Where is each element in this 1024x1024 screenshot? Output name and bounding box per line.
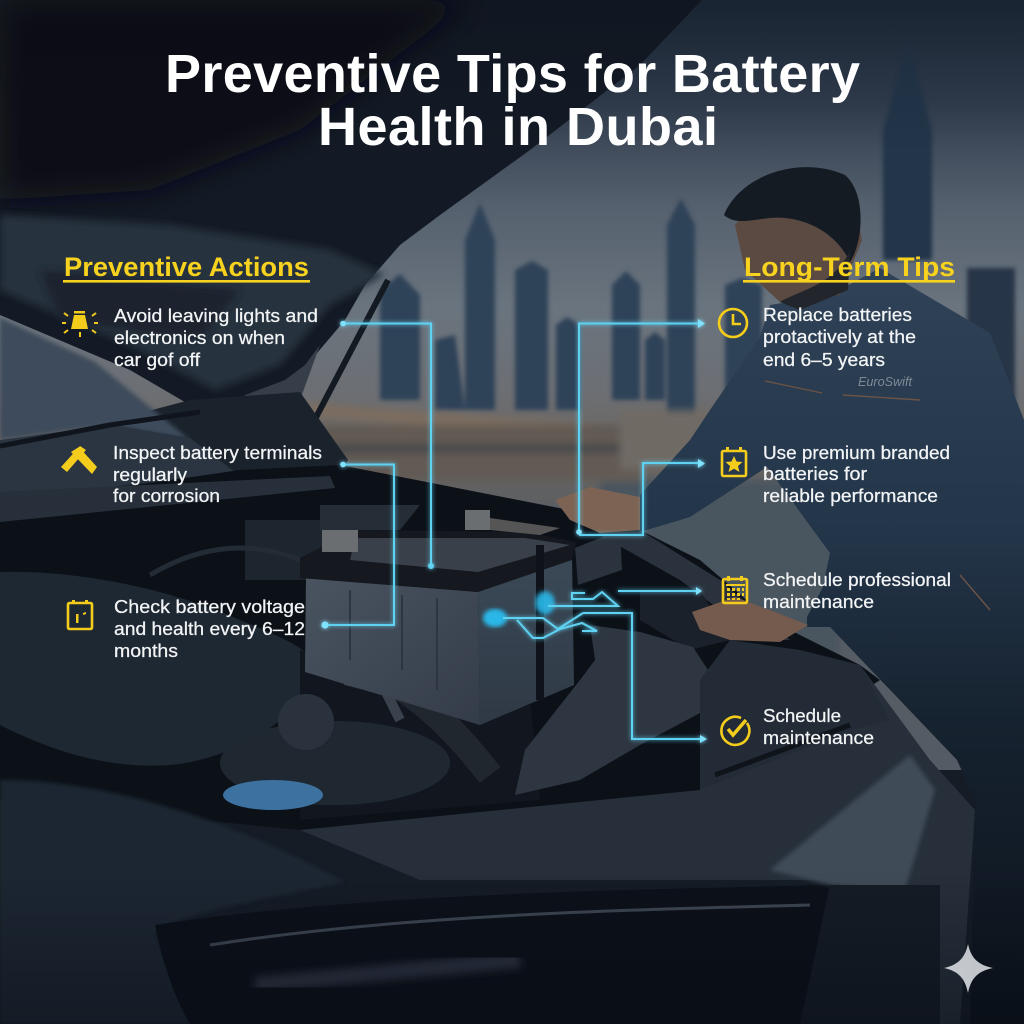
heading: Long-Term Tips: Long-Term Tips (744, 252, 955, 282)
item: professional maintenance: maintenance (763, 592, 874, 612)
connector: schedule maintenance (583, 613, 707, 743)
icon: battery calendar (68, 600, 92, 629)
item: voltage: and health every 6–12 (114, 619, 305, 639)
item: replace: Replace batteries (763, 305, 912, 325)
heading: Preventive Actions: Preventive Actions (64, 252, 309, 282)
item: lights: car gof off (114, 350, 201, 370)
icon: star calendar (722, 447, 746, 476)
mechanic body (640, 268, 1024, 1024)
mechanic head (735, 180, 862, 302)
item: lights (62, 306, 318, 370)
icon: hammer tool (61, 446, 97, 474)
item: replace: protactively at the (763, 327, 916, 347)
sparkle mark (944, 944, 993, 993)
item: premium: batteries for (763, 464, 867, 484)
item: voltage: months (114, 641, 178, 661)
road (600, 480, 840, 660)
item: professional maintenance (723, 570, 951, 612)
uniform logo: EuroSwift (858, 374, 913, 389)
item: voltage (68, 597, 305, 661)
connector: premium batteries (579, 459, 705, 535)
item: schedule maintenance: maintenance (763, 728, 874, 748)
connector lines (322, 319, 707, 743)
car battery (300, 510, 576, 725)
list: preventive actions (61, 306, 322, 661)
connector: replace batteries (576, 319, 705, 535)
item: premium (722, 443, 950, 506)
icon: warning lamp (62, 311, 98, 337)
connector: lights to battery (340, 321, 434, 569)
windshield and wiper (0, 318, 348, 525)
item: voltage: Check battery voltage (114, 597, 305, 617)
item: terminals: for corrosion (113, 486, 220, 506)
connector: terminals to battery (322, 462, 394, 628)
title: Health in Dubai (318, 97, 718, 157)
connector: professional maintenance (618, 587, 702, 595)
car fender and front panel (300, 640, 975, 1024)
item: terminals: regularly (113, 465, 187, 485)
hood strut (312, 280, 388, 425)
title (165, 44, 860, 157)
open car hood (0, 0, 702, 440)
item: terminals: Inspect battery terminals (113, 443, 322, 463)
item: schedule maintenance (721, 706, 874, 748)
battery energy wave (484, 592, 618, 638)
engine bay (0, 465, 880, 830)
engine cover right (515, 625, 710, 795)
item: replace: end 6–5 years (763, 350, 885, 370)
title: Preventive Tips for Battery (165, 44, 860, 104)
item: terminals (61, 443, 322, 506)
engine cover left (0, 572, 318, 766)
item: schedule maintenance: Schedule (763, 706, 841, 726)
item: premium: Use premium branded (763, 443, 950, 463)
icon: check circle (721, 717, 749, 745)
item: professional maintenance: Schedule professional (763, 570, 951, 590)
bridge and warm lights (230, 398, 740, 480)
foreground hood (0, 780, 345, 1024)
base of car (0, 770, 1024, 1024)
mechanic (555, 167, 1024, 1024)
item: lights: electronics on when (114, 328, 285, 348)
item: replace (719, 305, 916, 370)
pockets (765, 381, 990, 610)
icon: grid calendar (723, 576, 747, 603)
list: long-term tips (719, 305, 951, 748)
hands (555, 487, 640, 533)
item: lights: Avoid leaving lights and (114, 306, 318, 326)
icon: clock (719, 309, 747, 337)
hoses and reservoir (220, 650, 540, 820)
headlight and grille (155, 755, 940, 1024)
item: premium: reliable performance (763, 486, 938, 506)
